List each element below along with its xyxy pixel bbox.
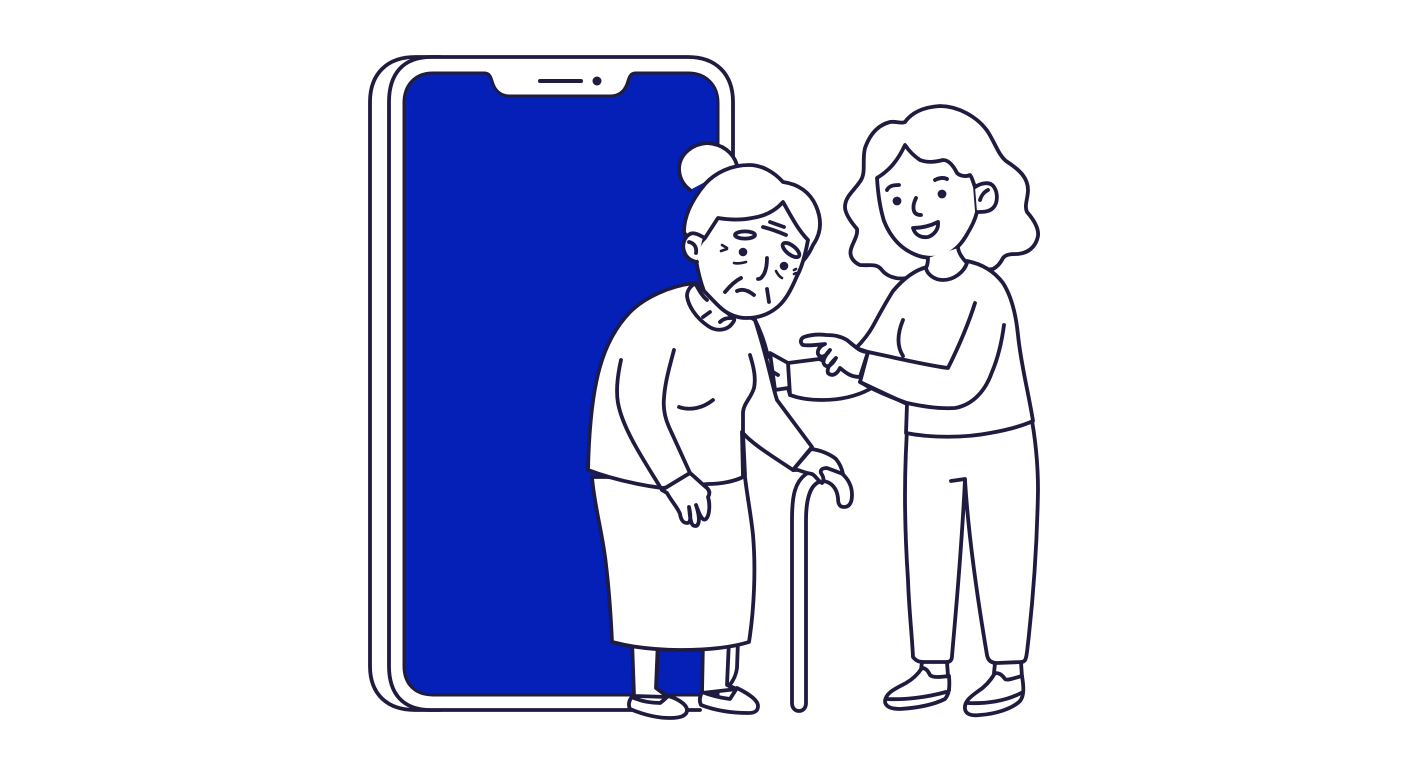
cheek oval [780, 240, 802, 260]
pants crotch tick [951, 479, 965, 481]
neck right edge [755, 320, 768, 357]
pointing hand [801, 335, 868, 377]
pants [905, 410, 1038, 663]
cheek folds [725, 278, 769, 302]
phone [370, 57, 733, 710]
right shoe [700, 688, 758, 713]
ear [975, 183, 997, 212]
arm lower line [860, 325, 1004, 408]
cane [792, 467, 852, 711]
skirt [592, 477, 754, 650]
phone back edge [370, 57, 440, 710]
inner ear [689, 242, 696, 253]
forehead wrinkles [763, 222, 786, 235]
hair [845, 106, 1038, 279]
chest line [898, 320, 903, 356]
phone speaker [540, 79, 581, 83]
near sleeve lines [617, 350, 690, 490]
face [877, 145, 977, 258]
collar wrinkles [695, 283, 732, 322]
right leg [702, 640, 737, 693]
left sole [887, 692, 946, 699]
arm inner line [868, 303, 975, 368]
left ankle [921, 662, 949, 690]
smile [913, 222, 938, 237]
collar [687, 283, 734, 330]
right shoe [965, 673, 1023, 715]
elderly woman [588, 143, 852, 718]
front body line [743, 355, 755, 475]
left shoe [629, 696, 687, 718]
eyes [739, 248, 747, 256]
rear calf [729, 640, 738, 686]
caregiver [770, 106, 1038, 715]
drooping hand [662, 473, 709, 526]
right ankle [994, 662, 1023, 692]
collar [926, 248, 967, 280]
crow's feet and eye lines [721, 245, 796, 278]
eyebrows [887, 178, 947, 190]
sleeve reaching arm [770, 353, 870, 400]
nose [758, 258, 767, 279]
torso and arm [588, 283, 812, 488]
nose [913, 198, 921, 215]
hair [684, 165, 820, 262]
hidden sleeve crease [773, 372, 778, 375]
left leg [632, 640, 668, 697]
left shoe [885, 668, 949, 709]
face [696, 202, 808, 318]
phone front body fill [389, 57, 733, 710]
shirt body [856, 261, 1033, 437]
phone front outline [389, 57, 733, 710]
chest line [679, 400, 713, 409]
bun [679, 143, 737, 190]
ear [683, 233, 703, 262]
sleeve cuff line [788, 363, 790, 395]
face details [721, 222, 802, 302]
hand on cane [793, 449, 843, 483]
right sole [967, 693, 1021, 703]
forehead oval [735, 231, 755, 239]
phone camera [592, 76, 602, 86]
frown mouth [737, 290, 754, 295]
phone screen [404, 73, 718, 695]
eyes [893, 190, 946, 205]
inner ear [980, 190, 988, 200]
